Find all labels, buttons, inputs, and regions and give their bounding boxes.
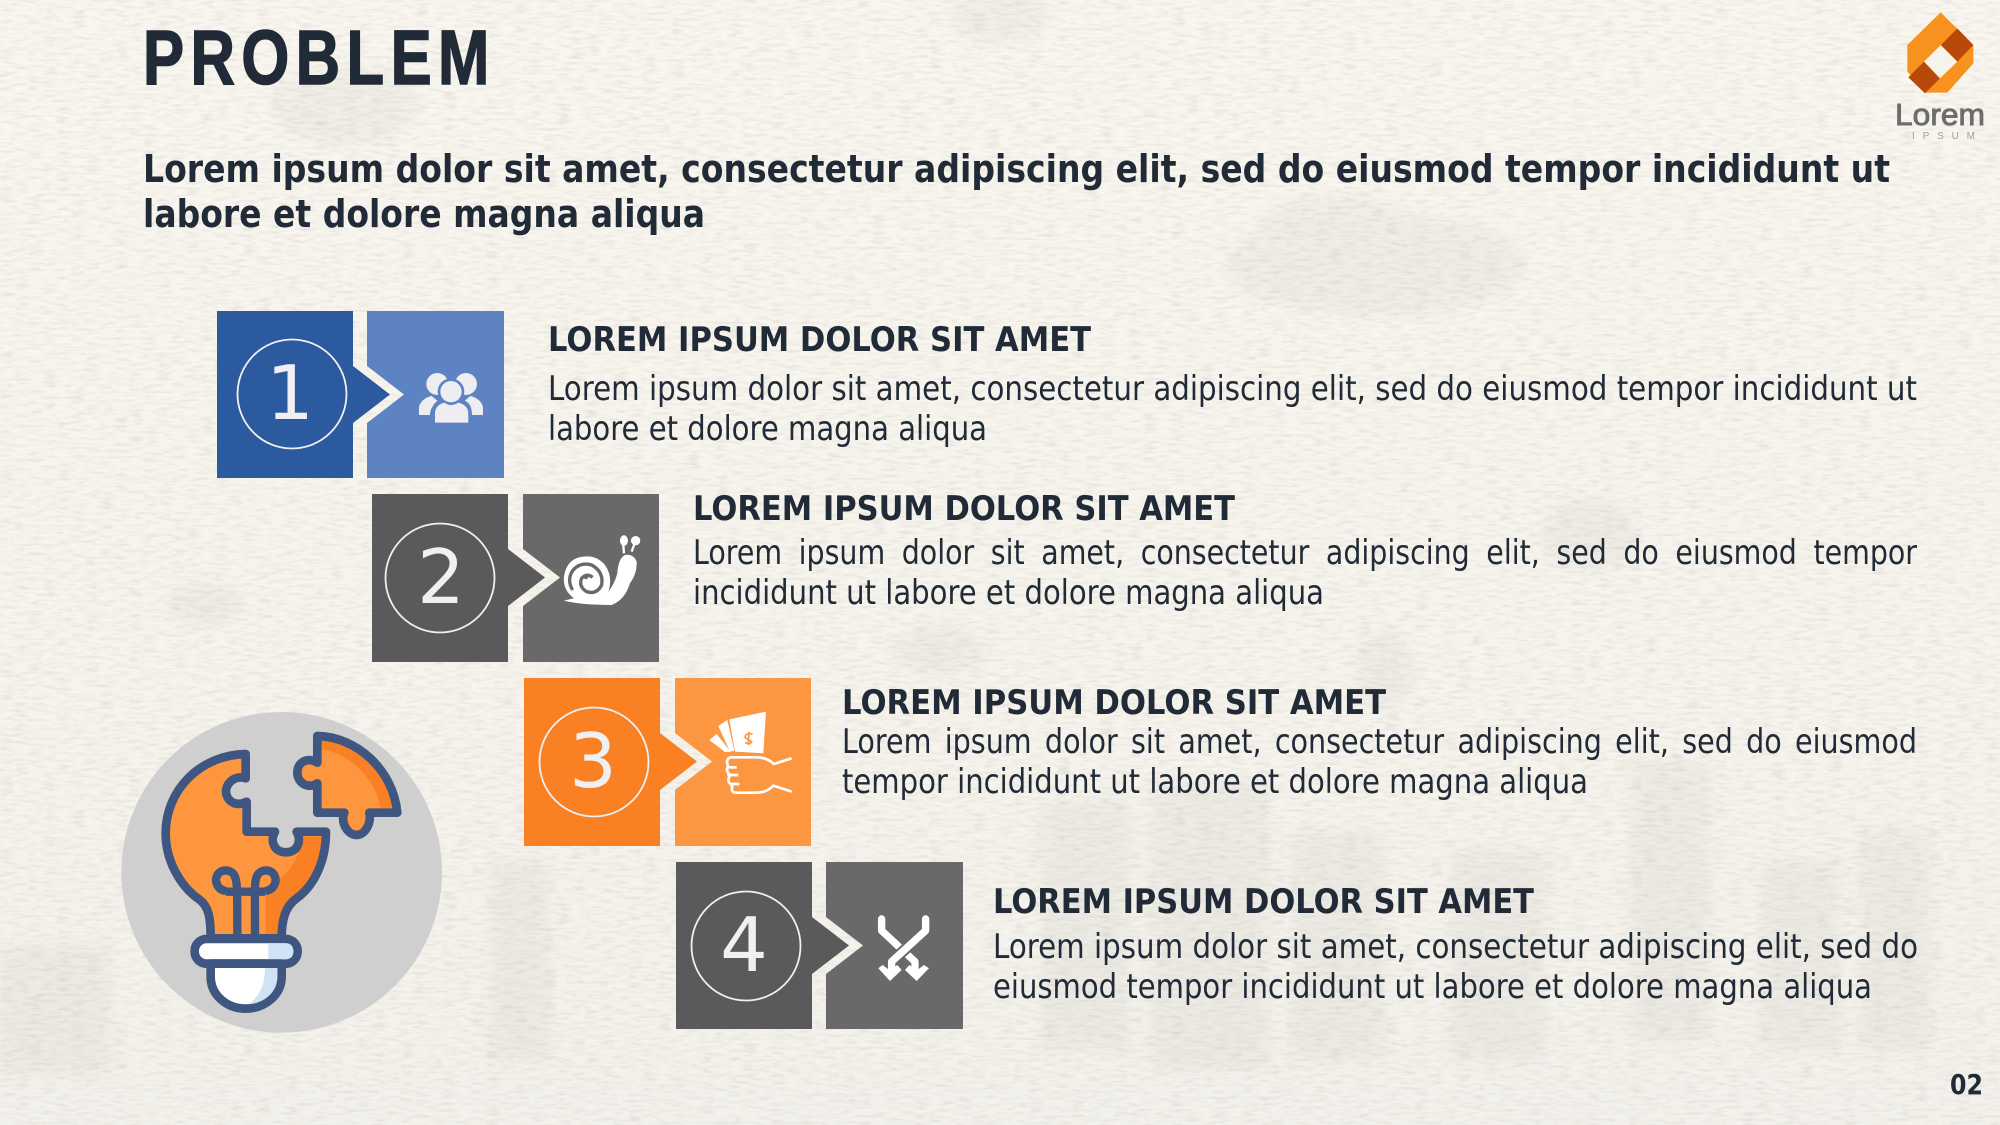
bulb base (195, 939, 298, 1009)
number 3: 3 (569, 717, 617, 805)
step 4 heading: LOREM IPSUM DOLOR SIT AMET (993, 882, 1535, 922)
step 1 graphic (217, 311, 504, 478)
step 3 text: tempor incididunt ut labore et dolore magna aliqua (842, 762, 1588, 802)
step 2 text: incididunt ut labore et dolore magna aliqua (693, 573, 1324, 613)
subtitle (143, 147, 1890, 236)
icon: money in hand (709, 712, 792, 793)
step 2 graphic (372, 494, 659, 662)
step 1 heading: LOREM IPSUM DOLOR SIT AMET (548, 320, 1092, 360)
logo wordmark: Lorem (1895, 97, 1985, 132)
illustration: light bulb with puzzle piece (121, 712, 442, 1033)
page number: 02 (1950, 1068, 1983, 1101)
logo (1895, 12, 1985, 142)
step 3 graphic (524, 678, 811, 846)
icon: people (419, 373, 483, 425)
number 1: 1 (266, 349, 314, 437)
puzzle piece (297, 736, 397, 835)
logo mark (1907, 12, 1973, 93)
step 4 text: eiusmod tempor incididunt ut labore et dolore magna aliqua (993, 967, 1872, 1007)
bulb glass (166, 754, 326, 938)
step 2 text (693, 533, 1917, 613)
number 2: 2 (417, 533, 465, 621)
step 3 heading: LOREM IPSUM DOLOR SIT AMET (842, 683, 1387, 723)
icon: crossing arrows (878, 919, 929, 981)
title: PROBLEM (143, 14, 496, 101)
filament (216, 870, 276, 937)
step 3 text (842, 722, 1917, 802)
step 4 text (993, 927, 1918, 1007)
step 4 graphic (676, 862, 963, 1029)
step 2 heading: LOREM IPSUM DOLOR SIT AMET (693, 489, 1236, 529)
icon: snail (564, 535, 640, 605)
subtitle: labore et dolore magna aliqua (143, 192, 705, 236)
logo tagline: IPSUM (1912, 131, 1975, 142)
step 1 text: labore et dolore magna aliqua (548, 409, 987, 449)
step 1 text (548, 369, 1917, 449)
number 4: 4 (720, 901, 768, 989)
